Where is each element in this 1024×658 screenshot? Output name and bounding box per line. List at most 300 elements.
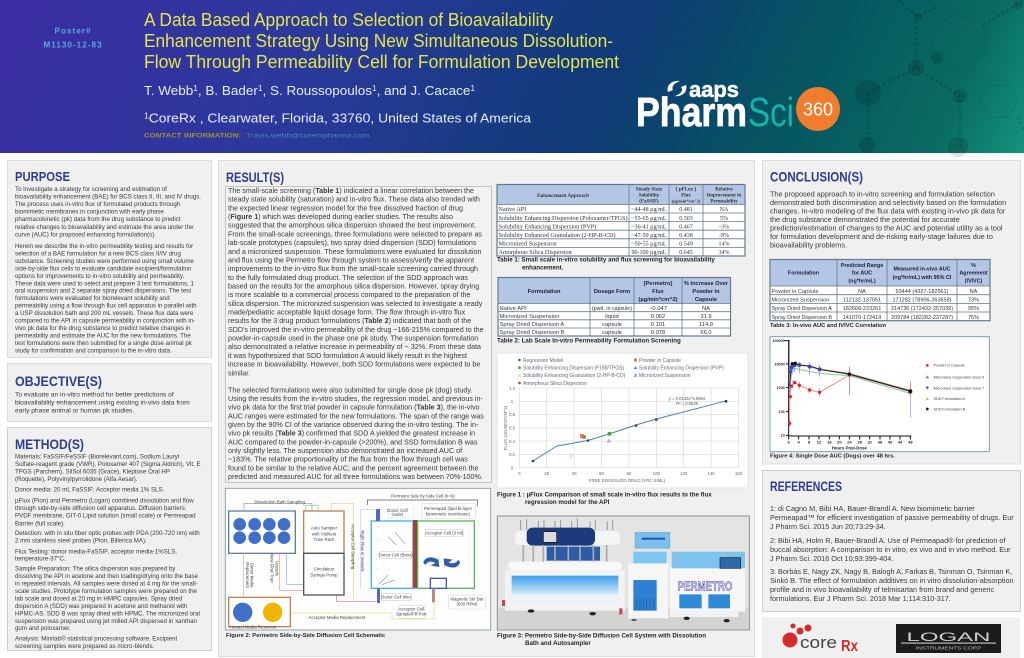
text: purpose body: curve (AUC) for proposed enhancing formulation(s). <box>15 231 156 238</box>
header band <box>0 0 1024 157</box>
affiliation: CoreRx , Clearwater, Florida, 33760, United States of America <box>149 110 532 126</box>
chart legend: Micronized Suspension <box>639 373 691 379</box>
schematic: pipes <box>243 500 477 619</box>
text: results body: powder-in-capsule used in the phase one pk study. The suspension formulation <box>228 335 478 343</box>
text: references list: formulations. Eur J Pharm Sci. 2018 Mar 1;114:310-317. <box>770 594 951 603</box>
text: results body: to the fully formulated drug product. The selection of the SDD approach was <box>228 274 468 282</box>
text: purpose body: vivo pk data for the drug substance to predict relative changes in <box>15 325 191 332</box>
table 2: capsule <box>602 330 622 336</box>
text: results body <box>226 186 492 482</box>
text: references list: Permeapad™ for efficient investigation of passive permeability of drugs. Eur <box>770 513 1014 522</box>
text: results body: predicted and measured AUC for all three formulations was between 70%-100%. <box>228 473 483 481</box>
text: methods body <box>15 453 201 650</box>
text: methods body: scale studies. Prototype formulation samples were prepared on the <box>15 588 198 595</box>
chart axes: 10 <box>781 434 785 438</box>
table 1: Enhancement Approach <box>537 194 589 199</box>
table 3: % <box>971 263 976 269</box>
chart legend: Solubility Enhancing Dispersion (F188/TPGS) <box>523 366 624 372</box>
figure 1: flux regression chart: 0 <box>518 471 521 476</box>
schematic: labels: Replacement <box>245 562 250 589</box>
schematic: acceptor cell: Acceptor Cell (3 ml) <box>425 530 464 535</box>
table 1: 0.503 <box>679 216 693 222</box>
figure 1: flux regression chart: 80 <box>626 471 632 476</box>
chart legend: Powder In Capsule <box>934 364 965 368</box>
text: references list: J Pharm Sci. 2016 Oct 10;93:399-404. <box>770 554 893 563</box>
table 1: 0.438 <box>679 233 693 239</box>
table 1: 0.645 <box>679 250 693 256</box>
table 1: -3% <box>719 224 729 230</box>
text: methods body: Sulfate-reagent grade (VWR), Poloxamer 407 (Sigma Aldrich), Vit. E <box>15 461 201 468</box>
text: purpose body: relative changes to bioavailability and estimate the area under the <box>15 224 194 231</box>
figure 1: flux regression chart: 1 <box>511 399 514 404</box>
text: methods body: Barrier (full scale). <box>15 520 65 527</box>
schematic: syringe pump: Syringe Pump <box>310 573 338 578</box>
figure 1: flux regression chart: 0 <box>511 466 514 470</box>
table 1: Improvement in <box>707 194 741 198</box>
text: references list <box>770 504 1014 603</box>
table 1: 14% <box>718 242 730 248</box>
caption: figure 2: Figure 2: Permetro Side-by-Side Diffusion Cell Schematic <box>226 633 386 639</box>
schematic: labels: biomimetic membrane) <box>426 511 471 516</box>
photo: autosampler <box>628 532 670 618</box>
authors: 1 <box>372 84 377 93</box>
table 3: Formulation <box>788 270 819 276</box>
chart equation: y = 0.0132x^0.8904 <box>669 396 706 401</box>
schematic: donor cell <box>371 509 413 603</box>
table 2: [Permetro] <box>644 281 672 287</box>
schematic: labels <box>245 494 485 620</box>
text: results body: similar. <box>228 369 250 377</box>
text: purpose body: pharmacokinetic (pk) data from the drug substance to predict <box>15 216 181 223</box>
text: conclusions body: The proposed approach to in-vitro screening and formulation selection <box>770 190 995 199</box>
caption: figure 1 <box>497 491 712 506</box>
logo: Logan Instruments: INSTRUMENTS CORP <box>916 646 982 650</box>
chart legend: Micronized Suspension Dose 7 <box>934 387 984 391</box>
table 1: ~47-59 µg/mL <box>631 233 667 239</box>
title: Flow Through Permeability Cell for Formulation Development <box>144 52 619 72</box>
schematic: auto sampler: Auto Sampler <box>311 526 338 531</box>
chart axes: 36 <box>878 439 883 444</box>
table 3: (ng*hr/mL) with 95% CI <box>893 275 952 281</box>
figure 1: flux regression chart: 140 <box>707 471 715 476</box>
schematic: labels: Magnetic Stir Bar <box>450 597 484 602</box>
table 1: Permeability <box>710 200 738 204</box>
chart legend: Amorphous Silica Dispersion <box>523 381 587 387</box>
authors <box>144 83 476 98</box>
text: purpose body: a USP dissolution bath and 200 mL vessels. These flux data were <box>15 310 194 317</box>
text: results body: given by the 90% CI of the variance observed during the in-vitro testing. The in- <box>228 421 479 429</box>
table 3: Agreement <box>959 270 988 276</box>
heading: methods: METHOD(S) <box>15 437 84 452</box>
chart legend <box>926 364 984 411</box>
text: conclusions body: for formulation development and de-risking early-stage failures due to <box>770 232 993 241</box>
title: A Data Based Approach to Selection of Bioavailability <box>144 10 553 30</box>
figure 1: flux regression chart: 0.4 <box>509 439 516 444</box>
text: results body: ~183%. The relative proportionality of the flux from the flow through cell was <box>228 456 468 464</box>
text: results body: is more scalable to a commercial process compared to the preparation of the <box>228 291 471 299</box>
caption: figure 1: Figure 1 : µFlux Comparison of small scale in-vitro flux results to the flux <box>497 491 712 498</box>
text: results body: AUC ranges were estimated for the new formulations. The span of the range was <box>228 412 484 420</box>
table 3: 209784 (182282-237287) <box>891 315 953 321</box>
text: results body: suggested that the amorphous silica dispersion showed the best improvement. <box>228 222 476 230</box>
authors: , B. Bader <box>198 83 259 98</box>
text: methods body: lab scale and dosed at 20 mg in HMPC capsules. Spray dried <box>15 596 183 603</box>
schematic: labels: Permeapad (lipid bi-layer <box>424 506 473 511</box>
table 3 <box>770 260 990 321</box>
figure 1: flux regression chart: 120 <box>680 471 688 476</box>
text: references list: Sinkó B. The effect of formulation additives on in vitro dissolution-absorption <box>770 576 1014 585</box>
table 3: (ng*hr/mL) <box>848 278 876 284</box>
table 2: % Increase Over <box>684 281 729 287</box>
table 3: NA <box>970 289 978 295</box>
text: objectives body: early phase animal or human pk studies. <box>15 408 134 414</box>
text: methods body: (Roquette), Polyvinylpyrrolidone (Alfa Aesar). <box>15 476 138 483</box>
schematic: labels: Donor Cell <box>387 508 408 513</box>
table 1: 90-100 µg/mL <box>632 250 667 256</box>
table 3: (IVIVC) <box>965 278 983 284</box>
table 2: Capsule <box>695 297 717 303</box>
contact information: CONTACT INFORMATION: <box>144 132 241 140</box>
logo: aaps PharmSci 360: Pharm <box>636 89 747 135</box>
heading: objectives: OBJECTIVE(S) <box>15 374 102 389</box>
table 2: NA <box>702 306 710 312</box>
table 2: Spray Dried Dispersion A <box>500 322 564 328</box>
text: objectives body: To evaluate an in-vitro method for better predictions of <box>15 392 174 398</box>
text: methods body: Donor media: 20 mL FaSSIF; Acceptor media 1% SLS. <box>15 486 165 493</box>
schematic: labels: Donor Cell Inlet <box>381 594 412 599</box>
text: purpose body: These data were used to select and prepare 3 test formulations, 1 <box>15 280 194 287</box>
schematic: labels: Right Flow in Vessels <box>360 530 365 572</box>
chart axes: 48 <box>908 439 913 444</box>
figure 3: photo of permetro system <box>497 516 749 630</box>
text: methods body: Flux Testing: donor media-FaSSIF, acceptor media-1%SLS, <box>15 548 177 555</box>
chart axes: 12 <box>817 439 822 444</box>
schematic: acceptor cell <box>418 521 474 602</box>
schematic: auto sampler: Tube Rack <box>314 537 335 542</box>
table 1: 34% <box>718 250 730 256</box>
table 3: 95% <box>968 306 979 312</box>
panel: references <box>762 470 1020 612</box>
text: results body: lab-scale prototypes (capsules), two spray dried dispersion (SDD) formulations <box>228 239 477 247</box>
text: results body: and a micronized suspension. These formulations were evaluated for dissolution <box>228 248 482 256</box>
text: conclusions body: bioavailability problems. <box>770 241 847 250</box>
figure 1: flux regression chart: 1.2 <box>509 386 516 391</box>
text: purpose body: oral suspension and 2 separate spray dried dispersions. The test <box>15 288 191 295</box>
panel: purpose <box>8 160 212 358</box>
table 1: Solubility Enhancing Dispersion (Poloxamer/TPGS) <box>498 215 628 222</box>
chart axes: 100000 <box>772 339 785 343</box>
text: results body: based on the results for the amorphous silica dispersion. However, spray drying <box>228 282 479 290</box>
text: results body: AUC compared to the powder-in-capsule (>200%), and SSD formulation B was <box>228 438 478 446</box>
text: purpose body: options for improvements to in-vitro solubility and permeability. <box>15 273 184 280</box>
table 1: NA <box>720 207 729 213</box>
table 1: Solubility Enhancing Dispersion (PVP) <box>498 223 596 230</box>
caption: table 2: Table 2: Lab Scale In-vitro Permeability Formulation Screening <box>497 338 681 345</box>
authors: 1 <box>258 84 263 93</box>
schematic: donor cell: Donor Cell (Bmix) <box>379 552 413 557</box>
text: purpose body: selection of a BAE formulation for a new BCS class II/IV drug <box>15 250 181 257</box>
text: methods body: temperature-37°C. <box>15 556 66 563</box>
text: references list: buccal absorption: A comparison to in vitro, ex vivo and in vivo method. Eur <box>770 545 1011 554</box>
table 1: 0.549 <box>679 242 693 248</box>
chart axes: 16 <box>827 439 832 444</box>
chart axes: 0 <box>788 439 791 444</box>
text: results body: increase in bioavailability. However, both SDD formulations were expected to be <box>228 361 480 369</box>
logo: CoreRx: core <box>800 633 837 652</box>
authors: , and J. Cacace <box>377 83 470 98</box>
table 3: 214736 (172432-257039) <box>891 306 953 312</box>
table 3: 75% <box>968 315 979 321</box>
table 1: ~50-55 µg/mL <box>631 242 667 248</box>
table 3: Powder in Capsule <box>772 289 818 295</box>
table 3: Micronized Suspension <box>772 298 829 304</box>
table 2: Powder in <box>692 289 720 295</box>
schematic: labels: Sample/Fill Port <box>396 611 427 616</box>
schematic: media reservoir <box>229 597 290 630</box>
chart axes <box>772 339 913 451</box>
chart gridlines and axes <box>519 388 738 468</box>
table 2: Dosage Form <box>594 289 630 295</box>
text: references list: 1: di Cagno M, Bibi HA, Bauer-Brandl A. New biomimetic barrier <box>770 504 975 513</box>
figure 1: flux regression chart: FLUX (UG/MIN*CM^2) <box>503 405 508 450</box>
chart legend <box>518 358 724 387</box>
table 1: 0.481 <box>679 207 693 213</box>
contact information: Travis.webb@corerxpharma.com. <box>246 132 372 140</box>
title: Enhancement Strategy Using New Simultaneous Dissolution- <box>144 31 613 51</box>
table 1: ~55-65 µg/mL <box>631 216 667 222</box>
table 1: ~44-48 µg/mL <box>631 207 667 213</box>
table 2: (µg/min*cm^2) <box>638 297 678 303</box>
panel: methods <box>8 428 212 650</box>
text: results body: SDD's improved the in-vitro permeability of the drug ~166-215% compared to the <box>228 326 484 334</box>
table 3: 171282 (78906-263658) <box>892 298 952 304</box>
photo: permetro unit: PERMETRO <box>678 579 732 594</box>
table 2: Spray Dried Dispersion B <box>500 330 565 336</box>
figure 1: flux regression chart: FREE DISSOLVED DRUG (VRC 6/ML) <box>589 478 666 483</box>
authors: 1 <box>193 84 198 93</box>
table 2: (pwd. in capsule) <box>592 306 632 312</box>
table 2 <box>498 278 730 336</box>
table 3: 182668-223261 <box>843 306 881 312</box>
logo: aaps PharmSci 360: Sci <box>748 89 794 135</box>
caption: figure 3 <box>497 632 706 647</box>
text: results body: (Figure 1) which was developed during earlier studies. The results also <box>228 213 453 221</box>
text: methods body: Analysis: Minitab® statistical processing software. Excipient <box>15 636 177 643</box>
figure 2: side-by-side diffusion cell schematic <box>225 488 491 630</box>
chart axes: 44 <box>898 439 903 444</box>
logo: CoreRx <box>782 624 858 655</box>
table 1: (FaSSIF) <box>639 200 659 204</box>
chart axes: 32 <box>867 439 873 444</box>
chart legend: Solubility Enhancing Dispersion (PVP) <box>639 366 724 372</box>
photo: dissolution bath <box>502 518 625 615</box>
text: results body: vivo pk results (Table 3) confirmed that SDD A yielded the greatest increase in <box>228 430 475 438</box>
text: results body: improvements to the in-vitro flux from the small-scale screening carried through <box>228 265 478 273</box>
text: purpose body: biomimetic membranes in conjunction with early phase <box>15 209 164 216</box>
schematic: auto sampler: with Vial/test <box>312 531 337 536</box>
caption: figure 1: regression model for the API <box>525 499 610 506</box>
text: results body: only slightly less. The suspension also demonstrated an increased AUC of <box>228 447 462 455</box>
text: purpose body <box>15 186 201 354</box>
chart series <box>789 340 910 427</box>
table 2: Micronized Suspension <box>500 314 559 320</box>
heading: conclusions: CONCLUSION(S) <box>770 170 863 184</box>
text: methods body: HPMC-AS. SDD B was spray dried with HPMC. The micronized oral <box>15 611 200 618</box>
text: results body: The selected formulations were also submitted for single dose pk (dog) study. <box>228 386 472 394</box>
poster number: M1130-12-83 <box>43 40 103 50</box>
chart axes: Hours Post-Dose <box>832 446 867 451</box>
table 3: for AUC <box>852 270 872 276</box>
table 3: 73% <box>968 298 979 304</box>
text: methods body: Sample Preparation: The silica dispersion was prepared by <box>15 566 176 573</box>
text: results body: made/pediatric acceptable liquid dosage form. The flow through in-vitro flux <box>228 309 466 317</box>
chart axes: 1000 <box>777 386 785 390</box>
chart axes: 20 <box>837 439 842 444</box>
chart equation <box>669 396 706 406</box>
logo: Logan Instruments: LOGAN <box>906 630 990 644</box>
table 1: Micronized Suspension <box>498 241 557 248</box>
chart axes: 10000 <box>774 362 785 366</box>
schematic: labels: Acceptor Media Replacement <box>309 615 366 620</box>
figure 4: single dose AUC chart <box>770 337 989 452</box>
table 1: 0.467 <box>679 224 693 230</box>
chart axes: 28 <box>857 439 863 444</box>
text: purpose body: permeability using a flow through flux cell apparatus in parallel with <box>15 303 197 310</box>
table 1: Flux <box>681 194 691 198</box>
schematic: syringe pump: Circulation <box>314 567 335 572</box>
chart data points <box>532 400 727 462</box>
panel: conclusions <box>762 160 1020 464</box>
table 1: (µg/min*cm^2) <box>672 198 701 204</box>
schematic: syringe pump <box>304 553 344 595</box>
table 1: Solubility <box>639 194 660 198</box>
caption: table 3: Table 3: In-vivo AUC and IVIVC Correlation <box>770 323 886 329</box>
table 2: Native API <box>500 306 527 312</box>
schematic: labels: Acceptor Cell <box>398 607 424 612</box>
table 1: Steady State <box>636 188 663 192</box>
table 1: Relative <box>715 188 734 192</box>
panel: objectives <box>8 364 212 422</box>
text: methods body: PVDF membrane, GIT-0 Lipid solution (small scale) or Permeapad <box>15 513 196 520</box>
caption: table 1 <box>497 257 715 272</box>
text: results body: The small-scale screening (Table 1) indicated a linear correlation between the <box>228 187 474 195</box>
text: methods body: Materials: FaSSIF/FeSSIF (Biorelevant.com), Sodium Lauryl <box>15 453 179 460</box>
table 2: Formulation <box>528 289 561 295</box>
text: conclusions body: demonstrated both discrimination and selectivity based on the formulation <box>770 198 1006 207</box>
schematic: labels: Acceptor Cell Sampling <box>350 524 355 570</box>
caption: figure 3: Bath and Autosampler <box>525 640 591 647</box>
figure 1: flux regression chart: 0.8 <box>509 412 516 417</box>
schematic: labels: Vessels <box>274 561 279 576</box>
figure 1: flux regression chart: 40 <box>572 471 577 476</box>
table 1 <box>497 184 745 256</box>
table 3: 93444 (4327-182561) <box>896 289 949 295</box>
heading: results: RESULT(S) <box>226 170 284 185</box>
chart equation: R² = 0.9939 <box>676 401 699 406</box>
text: methods body: dissolving the API in acetone and then loading/drying onto the base <box>15 573 199 580</box>
heading: references: REFERENCES <box>770 479 842 494</box>
text: purpose body: To investigate a strategy for screening and estimation of <box>15 186 167 193</box>
figure 1: flux regression chart: 100 <box>653 471 661 476</box>
text: conclusions body: changes. In-vitro modeling of the flux data with existing in-vivo pk data for <box>770 207 1006 216</box>
table 3: Predicted Range <box>841 263 883 269</box>
panel: sponsor logos <box>762 617 1020 658</box>
text: methods body: dispersion A (SDD) was prepared in acetone and methanol with <box>15 603 188 610</box>
logo: aaps PharmSci 360: 360 <box>803 100 833 120</box>
text: purpose body: bioavailability enhancement (BAE) for BCS class II, III, and IV drugs. <box>15 194 201 201</box>
figure 1: flux regression chart <box>497 353 748 488</box>
chart axes: 24 <box>847 439 852 444</box>
text: conclusions body: the drug substance demonstrated the potential for accurate <box>770 215 960 224</box>
affiliation: 1 <box>144 112 149 120</box>
logo: aaps PharmSci 360: aaps <box>689 77 739 102</box>
text: objectives body: bioavailability enhancement using existing in-vivo data from <box>15 400 190 406</box>
text: results body: the expected linear regression model for the free dissolved fraction of drug <box>228 204 463 212</box>
text: methods body: gum and poloxamer. <box>15 625 71 632</box>
text: methods body: screening samples were prepared as micro-blends. <box>15 643 155 650</box>
figure 1: flux regression chart: 160 <box>735 471 743 476</box>
schematic: labels: Outlet <box>392 512 404 517</box>
table 1: -9% <box>719 233 729 239</box>
text: conclusions body: prediction/estimation of changes to the AUC and potential utility as a tool <box>770 224 1003 233</box>
schematic: dissolution bath <box>229 511 295 553</box>
text: results body: it was hypothesized that SDD formulation A would likely result in the highest <box>228 352 467 360</box>
text: purpose body: compared to the API in capsule permeability in conjunction with in- <box>15 318 195 324</box>
text: results body: From the small-scale screenings, three formulations were selected to prepare as <box>228 230 482 238</box>
text: purpose body: The process uses in-vitro flux of formulated products through <box>15 201 181 208</box>
schematic: labels: Permetro Side by Side Cell (n=6) <box>391 494 455 499</box>
chart regression line <box>533 401 725 461</box>
table 3: Spray Dried Dispersion B <box>772 315 832 321</box>
poster number: Poster# <box>54 26 92 36</box>
schematic: labels: Donor Media <box>250 563 255 588</box>
text: results body: found to be similar to the relative AUC; and the percent agreement between the <box>228 464 478 472</box>
text: references list: 2: Bibi HA, Holm R, Bauer-Brandl A. Use of Permeapad® for prediction of <box>770 536 1006 545</box>
table 1: ~36-41 µg/mL <box>631 224 667 230</box>
logo: Logan Instruments <box>896 624 1001 653</box>
table 2: 66.0 <box>700 330 712 336</box>
figure 1: flux regression chart: 20 <box>544 471 550 476</box>
figure 1: flux regression chart: 60 <box>599 471 604 476</box>
text: references list: J Pharm Sci. 2015 Jun 20;73:29-34. <box>770 522 886 531</box>
text: methods body: TPGS (Parchem), SilSol 6035 (Grace), Kleptose Oral HP <box>15 468 170 476</box>
chart axes: 40 <box>888 439 893 444</box>
panel: results <box>218 160 754 656</box>
table 3: Spray Dried Dispersion A <box>772 306 832 312</box>
title <box>144 10 619 72</box>
contact information <box>144 132 372 140</box>
chart legend: Micronized Suspension Dose 5 <box>934 375 984 379</box>
schematic: labels: New Flow Tran <box>270 554 275 583</box>
table 2: liquid <box>605 314 619 320</box>
table 2: 0.062 <box>651 314 665 320</box>
schematic: media reservoir: Heated Media Reservoir <box>230 625 277 630</box>
chart legend: SDD Formulation B <box>934 407 966 411</box>
text: methods body: in repeated intervals. All samples were dosed at 4 mg for the small- <box>15 581 198 588</box>
text: results body: results for the 3 drug product formulations (Table 2) indicated that both of the <box>228 317 471 325</box>
chart axes: 100 <box>779 410 785 414</box>
photo: permetro unit <box>631 552 745 622</box>
schematic: labels: (600 RPM) <box>457 601 478 606</box>
table 2: ~0.047 <box>649 306 667 312</box>
table 2: capsule <box>602 322 622 328</box>
text: purpose body: substance. Screening studies were performed using small volume <box>15 258 194 265</box>
heading: purpose: PURPOSE <box>15 169 70 184</box>
caption: table 1: Table 1: Small scale in-vitro solubility and flux screening for bioavailability <box>497 257 715 264</box>
figure 1: flux regression chart: 0.2 <box>509 452 516 457</box>
table 1: Solubility Enhanced Granulation (2-HP-B-CD) <box>498 232 616 239</box>
table 2: 114.9 <box>699 322 713 328</box>
